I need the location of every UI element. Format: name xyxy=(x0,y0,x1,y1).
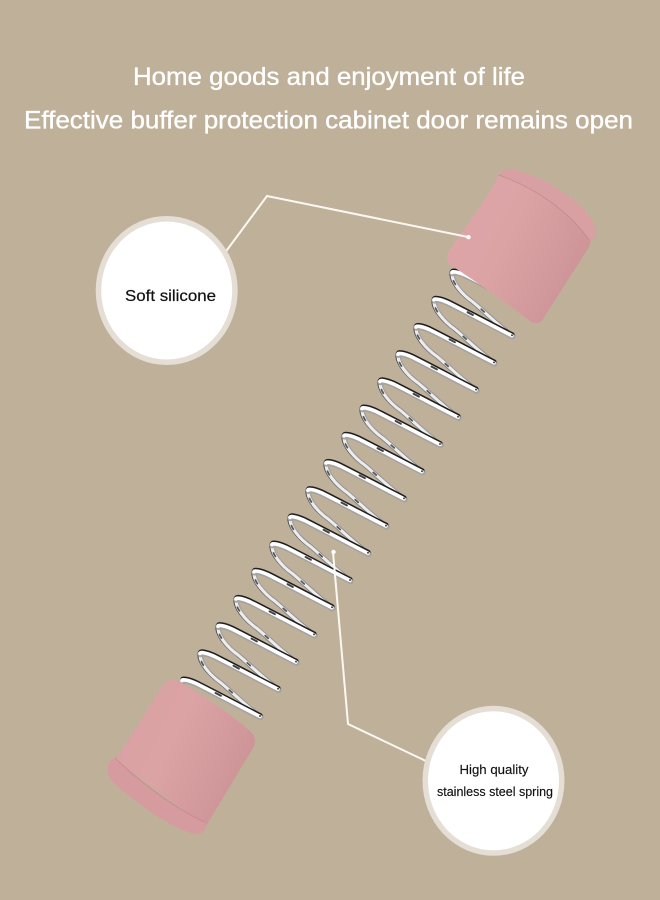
cap body xyxy=(447,175,592,323)
cap body xyxy=(115,680,255,826)
leader dot xyxy=(466,235,471,239)
stainless steel spring xyxy=(182,245,531,717)
title xyxy=(24,63,633,134)
circle fill xyxy=(428,711,559,850)
silicone cap: top right xyxy=(447,169,595,323)
cap lip xyxy=(108,758,206,834)
cap lip xyxy=(499,169,595,242)
circle ring xyxy=(422,706,564,856)
callout: stainless steel spring xyxy=(331,550,564,856)
lip groove xyxy=(115,758,204,822)
label xyxy=(437,763,553,799)
title line 2: Effective buffer protection cabinet door remains open xyxy=(24,106,633,134)
leader line xyxy=(333,552,428,762)
lip groove xyxy=(499,175,590,241)
callout: soft silicone xyxy=(96,196,471,365)
label: Soft silicone xyxy=(125,288,216,305)
silicone cap: bottom left xyxy=(108,680,255,834)
label: stainless steel spring xyxy=(437,785,553,799)
leader dot xyxy=(331,550,336,554)
title line 1: Home goods and enjoyment of life xyxy=(133,63,525,91)
leader line xyxy=(224,196,468,254)
circle fill xyxy=(101,222,232,360)
label: High quality xyxy=(460,763,529,777)
circle ring xyxy=(96,216,238,365)
